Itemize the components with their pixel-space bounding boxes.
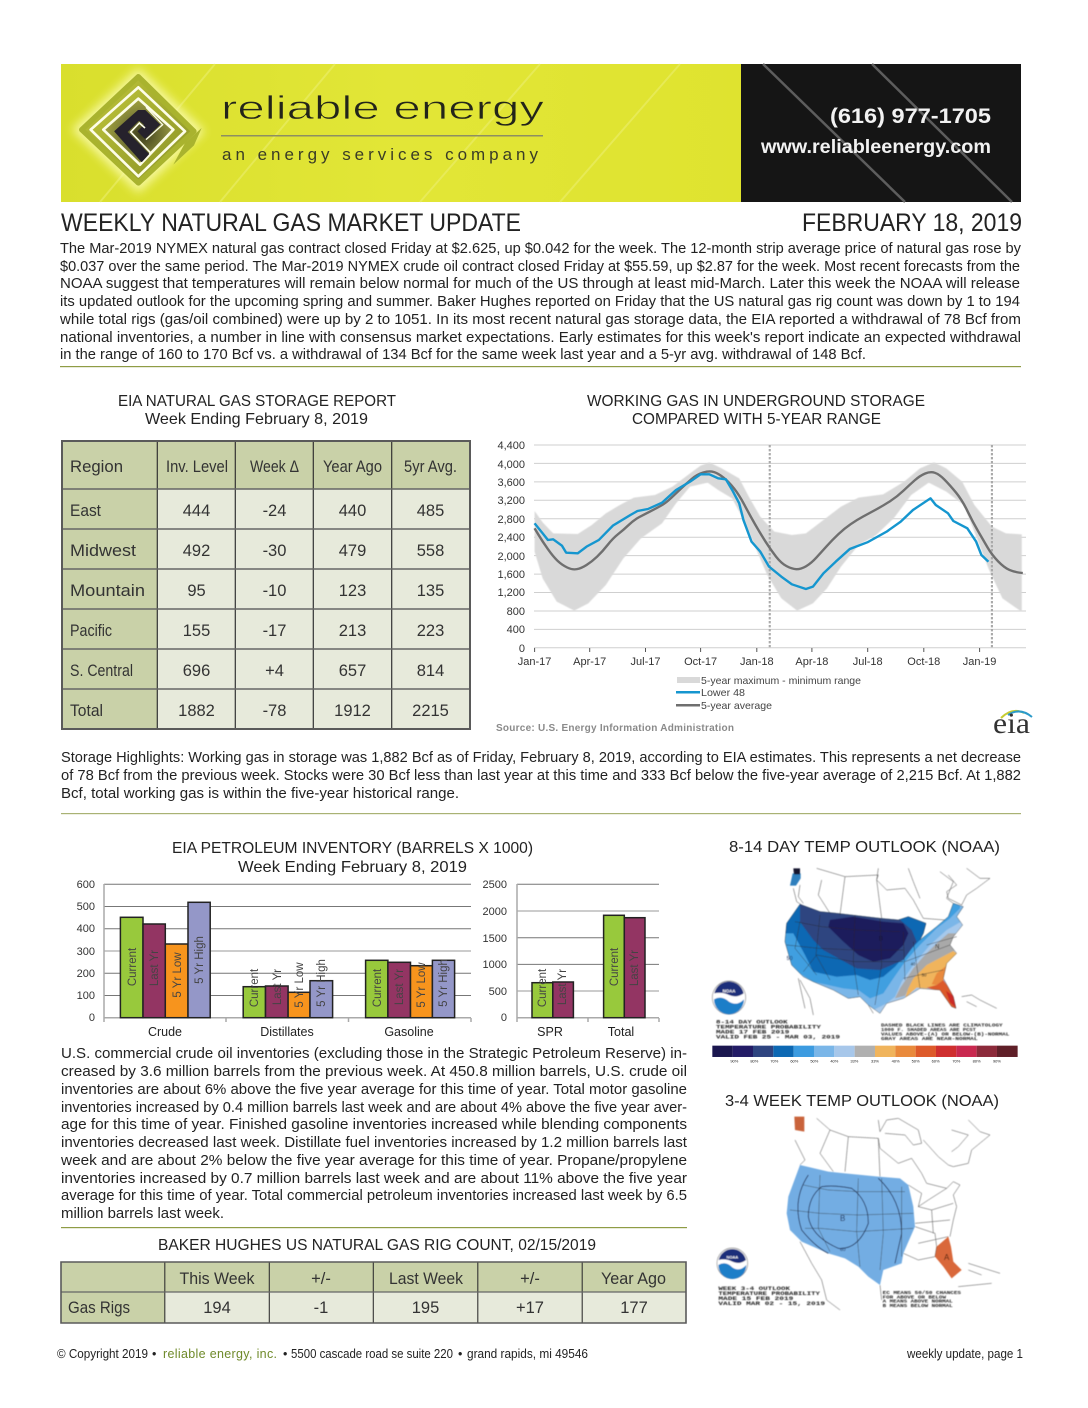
area letters: B <box>840 1214 845 1223</box>
petroleum paragraph: creased by 3.6 million barrels from the previous week. At 450.8 million barrels, U.S. crude oil <box>61 1063 687 1080</box>
bar chart: crude, distillates, gasoline: 300 <box>77 946 95 958</box>
petroleum paragraph: age for this time of year. Finished gasoline inventories increased while blending components <box>61 1116 687 1133</box>
bar value labels: 5 Yr High <box>194 936 206 984</box>
chart legend: 5-year average <box>701 700 772 712</box>
intro paragraph: while total rigs (gas/oil combined) were up by 2 to 1051. In its most recent natural gas storage data, the EIA reported a withdrawal of 78 Bcf from <box>59 311 1021 328</box>
table: natural gas storage: 2215 <box>412 702 449 720</box>
chart legend <box>676 675 861 712</box>
map color legend: 90% <box>730 1059 739 1064</box>
storage highlights text: Bcf, total working gas is within the five-year historical range. <box>61 785 459 802</box>
map caption right: VALUES ABOVE-(A) OR BELOW-(B)-NORMAL <box>881 1031 1010 1037</box>
table: rig count: 177 <box>620 1299 648 1317</box>
title: WEEKLY NATURAL GAS MARKET UPDATE <box>61 209 521 237</box>
date: FEBRUARY 18, 2019 <box>802 209 1022 237</box>
bar value labels <box>537 947 641 1007</box>
map color legend: 40% <box>892 1059 900 1064</box>
x axis labels: Jul-17 <box>631 656 660 668</box>
table: natural gas storage: 657 <box>339 662 366 680</box>
map caption left: MADE 17 FEB 2019 <box>716 1028 790 1035</box>
map drawing <box>787 1117 1000 1310</box>
map color legend: 33% <box>871 1059 879 1064</box>
heading: petroleum inventory: Week Ending February 8, 2019 <box>238 859 467 876</box>
intro paragraph: in the range of 160 to 170 Bcf vs. a withdrawal of 134 Bcf for the same week last year and a 5-yr avg. withdrawal of 148 Bcf. <box>60 346 866 363</box>
bar value labels: Last Yr <box>557 969 569 1005</box>
icon: NOAA logo: NOAA <box>723 988 736 993</box>
contour lines <box>798 1175 902 1263</box>
y axis labels: 2,000 <box>497 551 525 563</box>
table: natural gas storage: 492 <box>183 542 210 560</box>
map caption right <box>881 1023 1010 1042</box>
map caption left: VALID FEB 25 - MAR 03, 2019 <box>716 1034 841 1041</box>
heading: 3-4 week outlook: 3-4 WEEK TEMP OUTLOOK (NOAA) <box>725 1093 999 1110</box>
map caption right <box>883 1290 961 1309</box>
map color legend: 90% <box>993 1059 1001 1064</box>
y axis labels: 4,000 <box>497 459 525 471</box>
area letters: A <box>944 1253 950 1262</box>
icon: reliable energy logo <box>72 68 205 193</box>
y axis labels: 800 <box>507 606 525 618</box>
area letters: 60 <box>840 1247 846 1253</box>
map caption right: 1000 F. SHADED AREAS ARE PCST <box>881 1027 976 1033</box>
banner contact panel: (616) 977-1705 <box>830 105 991 128</box>
petroleum paragraph: inventories are about 6% above the five year average for this time of year. Total motor gasoline <box>61 1081 687 1098</box>
lower 48 line <box>535 474 988 589</box>
bar value labels: 5 Yr High <box>438 959 450 1007</box>
table: natural gas storage: 223 <box>417 622 444 640</box>
map color legend: 70% <box>770 1059 779 1064</box>
category labels: Distillates <box>260 1025 314 1039</box>
table: natural gas storage: -17 <box>263 622 286 640</box>
intro paragraph: national inventories, a number in line with consensus market expectations. Early estimates for this week's report indicate an expected withdrawal <box>60 329 1021 346</box>
table: natural gas storage: -10 <box>263 582 286 600</box>
bar value labels: Current <box>249 968 261 1007</box>
contour text: N <box>935 944 939 950</box>
petroleum paragraph: U.S. commercial crude oil inventories (excluding those in the Strategic Petroleum Reserve) in- <box>61 1045 687 1062</box>
icon: Alaska shading <box>794 1117 804 1132</box>
icon: NOAA logo <box>717 1248 748 1279</box>
temperature probability bands <box>784 902 964 1014</box>
bar value labels: Last Yr <box>272 969 284 1005</box>
y axis labels: 2,800 <box>497 514 525 526</box>
table: rig count: +/- <box>311 1270 331 1288</box>
banner contact panel: www.reliableenergy.com <box>760 137 991 158</box>
table: natural gas storage: +4 <box>265 662 284 680</box>
table: natural gas storage: 440 <box>339 502 366 520</box>
x axis labels: Jan-17 <box>518 656 551 668</box>
x axis labels <box>518 656 996 668</box>
bar value labels: Last Yr <box>394 969 406 1005</box>
table: natural gas storage: 696 <box>183 662 210 680</box>
total bars <box>604 915 645 1018</box>
map color legend: 50% <box>912 1059 920 1064</box>
chart legend: Lower 48 <box>701 687 745 699</box>
bar chart: SPR and total: 500 <box>489 986 507 998</box>
bar chart: SPR and total <box>483 879 659 1039</box>
map color legend <box>712 1046 1018 1064</box>
table: natural gas storage: 485 <box>417 502 444 520</box>
crude bars <box>120 902 210 1018</box>
state and province boundaries <box>790 1118 1000 1310</box>
footer left <box>57 1347 588 1361</box>
company tagline: an energy services company <box>222 145 538 164</box>
above-normal shaded area <box>935 1237 962 1278</box>
intro paragraph: The Mar-2019 NYMEX natural gas contract closed Friday at $2.625, up $0.042 for the week. The 12-month strip average price of natural gas rose by <box>60 240 1021 257</box>
bar value labels: 5 Yr Low <box>172 952 184 998</box>
bar chart: crude, distillates, gasoline: 600 <box>77 879 95 891</box>
table: natural gas storage: Pacific <box>70 622 112 640</box>
bar chart: SPR and total: 2500 <box>483 879 507 891</box>
heading: petroleum inventory: EIA PETROLEUM INVENTORY (BARRELS X 1000) <box>172 840 533 857</box>
map color legend: 60% <box>790 1059 799 1064</box>
bar value labels: 5 Yr High <box>316 959 328 1007</box>
contour text: B <box>879 935 884 942</box>
icon: Alaska shading <box>790 868 801 886</box>
gasoline bars <box>366 960 455 1018</box>
heading: storage report: EIA NATURAL GAS STORAGE REPORT <box>118 393 396 410</box>
map caption left: TEMPERATURE PROBABILITY <box>716 1023 822 1030</box>
table: natural gas storage: 5yr Avg. <box>404 458 457 476</box>
bar value labels: Last Yr <box>149 950 161 986</box>
map color legend: 80% <box>750 1059 759 1064</box>
5-year average line <box>535 471 1023 573</box>
bar chart: crude, distillates, gasoline: 0 <box>89 1012 95 1024</box>
below-normal shaded area <box>787 1165 915 1285</box>
heading: working gas chart <box>587 393 925 428</box>
table: natural gas storage: 814 <box>417 662 444 680</box>
map color legend: 60% <box>932 1059 940 1064</box>
heading: rig count: BAKER HUGHES US NATURAL GAS RIG COUNT, 02/15/2019 <box>158 1237 596 1254</box>
intro paragraph: $0.037 over the same period. The Mar-2019 NYMEX crude oil contract closed Friday at $55.59, up $2.87 for the week. Most recent forecasts from the <box>60 258 1020 275</box>
map: 8-14 day temperature outlook <box>712 868 1018 1064</box>
icon: NOAA logo <box>712 981 746 1014</box>
footer left: reliable energy, inc. <box>163 1347 277 1361</box>
banner yellow panel <box>61 64 741 202</box>
map caption right: A MEANS ABOVE NORMAL <box>883 1299 953 1305</box>
heading: storage report: Week Ending February 8, 2019 <box>145 411 368 428</box>
storage highlights text: Storage Highlights: Working gas in storage was 1,882 Bcf as of Friday, February 8, 2019, according to EIA estimates. This represents a net decrease <box>61 749 1021 766</box>
x axis labels: Oct-18 <box>907 656 940 668</box>
table: natural gas storage: -30 <box>263 542 286 560</box>
table: natural gas storage: 558 <box>417 542 444 560</box>
x axis labels: Apr-17 <box>573 656 606 668</box>
bar chart: SPR and total: 0 <box>501 1012 507 1024</box>
bar value labels: 5 Yr Low <box>416 962 428 1008</box>
petroleum paragraph: million barrels last week. <box>61 1205 224 1222</box>
bar chart: crude, distillates, gasoline: 100 <box>77 990 95 1002</box>
bar chart: crude, distillates, gasoline: 400 <box>77 923 95 935</box>
bar chart: SPR and total: 1000 <box>483 959 507 971</box>
contour text: 40 <box>911 962 916 967</box>
icon: eia logo: eia <box>993 707 1030 740</box>
map color legend: 70% <box>952 1059 961 1064</box>
table: rig count: -1 <box>314 1299 328 1317</box>
table: rig count: Year Ago <box>601 1270 666 1288</box>
intro paragraph <box>59 240 1021 363</box>
intro paragraph: NOAA suggest that temperatures will remain below normal for much of the US through at least mid-March. Later this week the NOAA will release <box>60 275 1020 292</box>
contour text: 50 <box>922 973 927 978</box>
petroleum paragraph <box>60 1045 688 1222</box>
bar value labels: 5 Yr Low <box>294 962 306 1008</box>
map caption left: VALID MAR 02 - 15, 2019 <box>718 1300 826 1307</box>
table: rig count: +/- <box>520 1270 540 1288</box>
map caption left: WEEK 3-4 OUTLOOK <box>718 1285 791 1292</box>
table: natural gas storage <box>62 441 470 729</box>
petroleum paragraph: inventories increased by 0.4 million barrels last week and are about 4% above the five year aver- <box>61 1099 687 1116</box>
map caption left: MADE 15 FEB 2019 <box>718 1295 794 1302</box>
footer left: • <box>458 1347 462 1361</box>
y axis labels: 1,200 <box>497 587 525 599</box>
line chart: working gas in underground storage <box>496 440 1032 740</box>
intro paragraph: its updated outlook for the upcoming spring and summer. Baker Hughes reported on Friday that the US natural gas rig count was down by 1 to 194 <box>60 293 1020 310</box>
heading: 8-14 day outlook: 8-14 DAY TEMP OUTLOOK (NOAA) <box>729 839 1000 856</box>
storage highlights text <box>61 749 1021 802</box>
category labels <box>537 1025 634 1039</box>
map caption right: GRAY AREAS ARE NEAR-NORMAL <box>881 1036 978 1042</box>
contour text <box>787 935 939 978</box>
map caption left: 8-14 DAY OUTLOOK <box>716 1018 788 1025</box>
petroleum paragraph: week and are about 2% below the five year average for this time of year. Propane/propylene <box>60 1152 687 1169</box>
bar chart: SPR and total: 2000 <box>483 906 507 918</box>
bar chart: crude, distillates, gasoline: 500 <box>77 901 95 913</box>
bar value labels: Current <box>609 947 621 986</box>
y axis labels: 400 <box>507 624 525 636</box>
map caption left <box>716 1018 841 1041</box>
table: natural gas storage: 213 <box>339 622 366 640</box>
map color legend: 50% <box>810 1059 819 1064</box>
category labels: SPR <box>537 1025 563 1039</box>
table: natural gas storage: 135 <box>417 582 444 600</box>
table: natural gas storage: 155 <box>183 622 210 640</box>
table: natural gas storage: 95 <box>187 582 206 600</box>
banner contact panel <box>741 64 1021 202</box>
heading: working gas chart: WORKING GAS IN UNDERGROUND STORAGE <box>587 393 925 410</box>
map caption right: B MEANS BELOW NORMAL <box>883 1303 953 1309</box>
5-year range band <box>535 462 1022 611</box>
map caption left <box>718 1285 826 1307</box>
y axis labels: 4,400 <box>497 440 525 452</box>
table: natural gas storage: 123 <box>339 582 366 600</box>
heading: petroleum inventory <box>172 840 533 876</box>
y axis labels: 3,200 <box>497 495 525 507</box>
table: rig count: This Week <box>180 1270 255 1288</box>
x axis labels: Jan-19 <box>963 656 996 668</box>
map caption right: FOR ABOVE OR BELOW <box>883 1294 946 1300</box>
bar chart: SPR and total: 1500 <box>483 933 507 945</box>
x axis labels: Apr-18 <box>795 656 828 668</box>
bar value labels: Current <box>372 968 384 1007</box>
footer left: • <box>283 1347 287 1361</box>
y axis labels <box>497 440 525 655</box>
table: natural gas storage: Week Δ <box>250 458 299 476</box>
y axis labels: 0 <box>519 643 525 655</box>
x axis labels: Jul-18 <box>853 656 883 668</box>
chart source: Source: U.S. Energy Information Administration <box>496 723 734 734</box>
map color legend: 80% <box>973 1059 981 1064</box>
table: natural gas storage: East <box>70 502 101 520</box>
map drawing <box>780 868 997 1018</box>
table: rig count: Gas Rigs <box>68 1299 130 1317</box>
map caption right: EC MEANS 50/50 CHANCES <box>883 1290 961 1296</box>
x axis labels: Jan-18 <box>740 656 774 668</box>
table: natural gas storage: Total <box>70 702 103 720</box>
bar chart: crude, distillates, gasoline: 200 <box>77 968 95 980</box>
table: natural gas storage: Region <box>70 458 123 476</box>
table: natural gas storage: -78 <box>263 702 286 720</box>
table: natural gas storage: Year Ago <box>323 458 382 476</box>
category labels: Gasoline <box>384 1025 434 1039</box>
map: 3-4 week temperature outlook <box>717 1117 1000 1310</box>
x axis labels: Oct-17 <box>684 656 717 668</box>
table: natural gas storage: 444 <box>183 502 210 520</box>
map color legend: 40% <box>830 1059 839 1064</box>
chart legend: 5-year maximum - minimum range <box>701 675 861 687</box>
category labels: Crude <box>148 1025 182 1039</box>
footer right: weekly update, page 1 <box>906 1347 1023 1361</box>
distillates bars <box>243 981 333 1018</box>
state and province boundaries <box>785 868 997 1015</box>
table: natural gas storage: Midwest <box>70 542 136 560</box>
heading: working gas chart: COMPARED WITH 5-YEAR RANGE <box>632 411 881 428</box>
table: natural gas storage: 479 <box>339 542 366 560</box>
petroleum paragraph: inventories decreased last week. Distillate fuel inventories increased by 1.2 million barrels last <box>61 1134 688 1151</box>
bar value labels <box>127 936 450 1008</box>
bar chart: crude, distillates, gasoline <box>77 879 471 1039</box>
table: rig count: 195 <box>412 1299 439 1317</box>
table: rig count: Last Week <box>389 1270 464 1288</box>
table: natural gas storage: -24 <box>263 502 286 520</box>
header banner <box>61 64 1021 202</box>
footer left: 5500 cascade road se suite 220 <box>291 1347 453 1361</box>
contour text: 50 <box>787 956 793 962</box>
category labels <box>148 1025 434 1039</box>
y axis labels: 3,600 <box>497 477 525 489</box>
y axis labels: 2,400 <box>497 532 525 544</box>
bar value labels: Last Yr <box>629 950 641 986</box>
petroleum paragraph: average for this time of year. Total commercial petroleum inventories increased last week by 6.5 <box>61 1187 687 1204</box>
company name: reliable energy <box>221 89 545 126</box>
heading: storage report <box>118 393 396 428</box>
footer left: grand rapids, mi 49546 <box>467 1347 588 1361</box>
petroleum paragraph: inventories increased by 0.7 million barrels last week and are about 11% above the five year <box>61 1170 687 1187</box>
table: rig count: 194 <box>203 1299 231 1317</box>
category labels: Total <box>608 1025 634 1039</box>
map caption left: TEMPERATURE PROBABILITY <box>718 1290 821 1297</box>
icon: NOAA logo: NOAA <box>726 1254 738 1259</box>
map caption right: DASHED BLACK LINES ARE CLIMATOLOGY <box>881 1023 1003 1029</box>
table: rig count: +17 <box>516 1299 544 1317</box>
footer left: • <box>152 1347 156 1361</box>
table: natural gas storage: 1882 <box>178 702 215 720</box>
y axis labels: 1,600 <box>497 569 525 581</box>
table: natural gas storage: Inv. Level <box>166 458 228 476</box>
area letters <box>840 1214 950 1262</box>
SPR bars <box>532 982 573 1018</box>
table: rig count <box>61 1262 686 1323</box>
bar value labels: Current <box>127 947 139 986</box>
table: natural gas storage: 1912 <box>334 702 371 720</box>
table: natural gas storage: S. Central <box>70 662 133 680</box>
storage highlights text: of 78 Bcf from the previous week. Stocks were 30 Bcf less than last year at this time and 333 Bcf below the five-year average of 2,215 Bcf. At 1,882 <box>61 767 1021 784</box>
footer left: © Copyright 2019 <box>57 1347 148 1361</box>
table: natural gas storage: Mountain <box>70 582 145 600</box>
bar value labels: Current <box>537 968 549 1007</box>
map color legend: 33% <box>850 1059 859 1064</box>
